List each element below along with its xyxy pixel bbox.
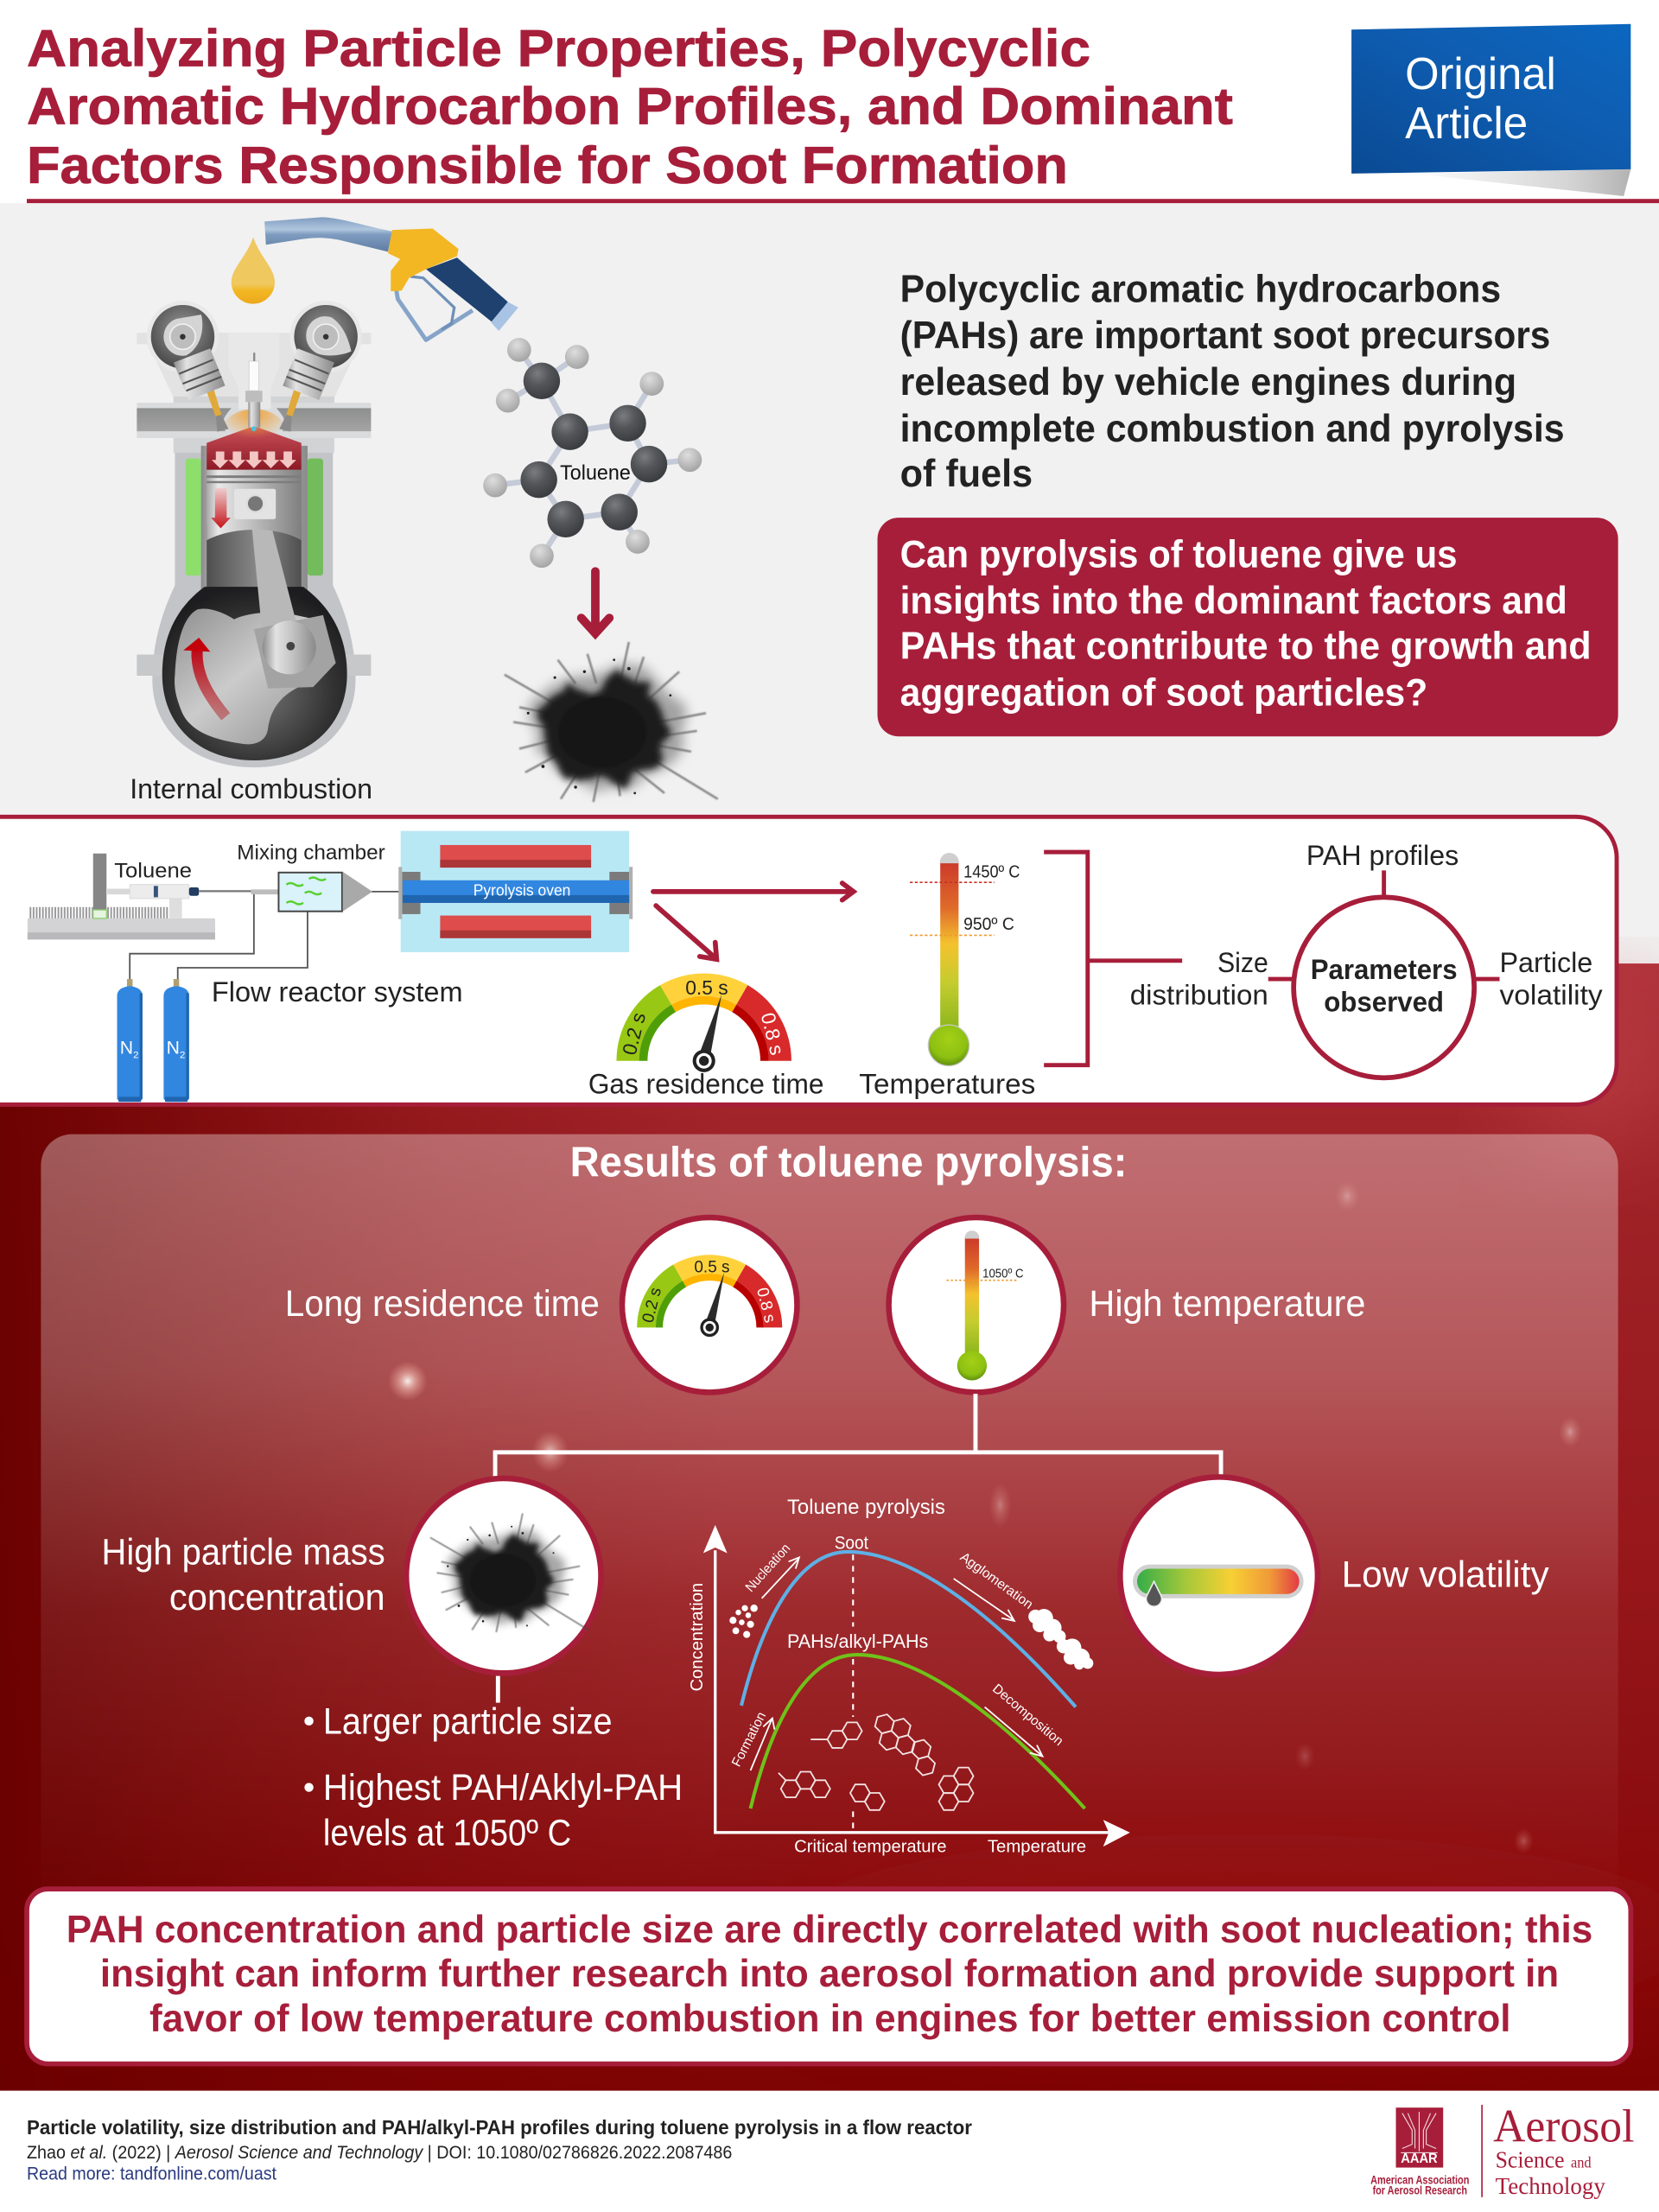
molecule: toluene (483, 338, 702, 568)
citation: Zhao et al. (2022) | Aerosol Science and Technology | DOI: 10.1080/02786826.2022.2087486 (27, 2143, 732, 2163)
PAH label: PAHs/alkyl-PAHs (787, 1630, 928, 1652)
counterweight (175, 608, 336, 744)
molecule label: Toluene (560, 461, 631, 485)
coolant left (186, 459, 201, 575)
bore (207, 524, 302, 593)
panel: methods (0, 817, 1617, 1104)
gauge: gas residence time (616, 974, 791, 1072)
pyrolysis oven: Pyrolysis oven (474, 881, 570, 899)
conclusion box: PAH concentration and particle size are directly correlated with soot nucleation; this (67, 1909, 1592, 1951)
connector (251, 889, 281, 894)
pin hole (286, 642, 295, 651)
intro text: Polycyclic aromatic hydrocarbons (900, 268, 1501, 310)
label: toluene: Toluene (114, 860, 192, 883)
footer (0, 2091, 1659, 2212)
red textured background (0, 963, 1659, 2092)
piston (207, 470, 302, 540)
label: long residence time: Long residence time (285, 1283, 600, 1324)
connector: parameter spokes (1268, 870, 1500, 979)
circle: low volatility (1120, 1477, 1318, 1675)
crank pin (263, 620, 316, 674)
cylinder liner (201, 446, 308, 593)
label: particle volatility: volatility (1500, 978, 1603, 1010)
illustration: internal combustion engine (130, 301, 372, 804)
PAH curve (751, 1655, 1085, 1808)
molecular bonds (495, 350, 690, 556)
soot label: Soot (835, 1534, 868, 1554)
gauge: gas residence time: 0.5 s (685, 976, 728, 999)
connector: soot to bullets (497, 1676, 499, 1703)
label: size distribution: distribution (1130, 978, 1268, 1010)
circle: residence gauge: 0.2 s (639, 1286, 665, 1325)
title: Factors Responsible for Soot Formation (27, 136, 1068, 194)
tubing (130, 892, 401, 981)
circle: parameters observed (1294, 897, 1474, 1077)
right cam (290, 301, 362, 372)
piston rings (207, 475, 302, 483)
bracket connector (1044, 852, 1182, 1065)
agglomerate cloud 2 (1057, 1638, 1093, 1669)
arrow: toluene to soot (582, 571, 609, 633)
pump post (93, 854, 106, 910)
badge: Original Article: Original (1405, 49, 1556, 99)
question box (878, 518, 1618, 736)
icon: fuel drop (232, 237, 275, 304)
results panel (41, 1135, 1618, 1924)
circle: residence gauge: 0.8 s (753, 1286, 779, 1325)
pump slider (93, 910, 106, 918)
diagram: flow reactor system (28, 831, 632, 1102)
logo: Aerosol Science and Technology: Technology (1496, 2173, 1605, 2200)
lower head (174, 397, 334, 453)
thermometer: temperatures (910, 853, 1020, 1065)
ignition glow (223, 409, 285, 451)
thermometer: temperatures: 950º C (963, 915, 1014, 934)
nitrogen cylinder 2: N (167, 1039, 180, 1058)
pump screw (29, 909, 168, 916)
label: high particle mass concentration: concentration (169, 1577, 385, 1618)
pressure arrows (212, 451, 296, 468)
intro text: (PAHs) are important soot precursors (900, 315, 1550, 357)
rotation arrowhead (183, 638, 210, 652)
label: size distribution: Size (1217, 946, 1268, 978)
logo: AAAR: American Association (1370, 2172, 1469, 2186)
logo: AAAR: AAAR (1401, 2152, 1438, 2166)
combustion chamber (207, 426, 302, 470)
left valve (174, 348, 228, 432)
circle: parameters observed: observed (1324, 986, 1444, 1018)
chart: toluene pyrolysis (688, 1497, 1130, 1857)
nitrogen cylinder 1: 2 (133, 1050, 138, 1060)
nitrogen cylinder 2 (163, 979, 189, 1102)
bullet list: levels at 1050º C (323, 1813, 571, 1853)
question box: PAHs that contribute to the growth and (900, 625, 1592, 667)
connector: results tree (495, 1394, 1221, 1478)
label: flow reactor system: Flow reactor system (212, 976, 463, 1007)
crank flanges (137, 655, 371, 676)
arrow: oven to residence time (656, 906, 716, 959)
mixing chamber (278, 872, 372, 912)
title: Aromatic Hydrocarbon Profiles, and Dominant (27, 77, 1233, 136)
agglomerate cloud 1 (1028, 1609, 1065, 1643)
gauge: gas residence time: 0.8 s (757, 1010, 789, 1058)
piston pin (247, 495, 264, 512)
spark plug (245, 353, 263, 431)
conclusion box: insight can inform further research into aerosol formation and provide support in (100, 1953, 1559, 1995)
citation: Particle volatility, size distribution and PAH/alkyl-PAH profiles during toluene pyrolysis in a flow reactor (27, 2116, 972, 2139)
question box: Can pyrolysis of toluene give us (900, 533, 1458, 575)
logo: Aerosol Science and Technology (1493, 2100, 1634, 2200)
chart axes (703, 1525, 1130, 1847)
nitrogen cylinder 2: 2 (180, 1050, 185, 1060)
circle: parameters observed: Parameters (1311, 953, 1458, 985)
molecule: methylnaphthalene (810, 1722, 862, 1748)
title rule (27, 199, 1659, 203)
logo: AAAR (1370, 2107, 1469, 2197)
bullet list: Larger particle size (323, 1701, 613, 1742)
citation: Read more: tandfonline.com/uast (27, 2164, 276, 2183)
formation arrow: Formation (729, 1710, 769, 1770)
arrow: oven to temperature (653, 883, 854, 900)
head side strips (137, 403, 371, 438)
circle: residence gauge (622, 1217, 797, 1392)
conclusion box (27, 1889, 1630, 2064)
agglomeration arrow: Agglomeration (957, 1550, 1035, 1612)
molecule: benzopyrene (873, 1713, 938, 1777)
coolant right (308, 459, 323, 575)
critical temperature marker (852, 1554, 854, 1830)
intro text: incomplete combustion and pyrolysis (900, 408, 1565, 450)
label: low volatility: Low volatility (1342, 1554, 1549, 1595)
circle: soot (406, 1478, 601, 1673)
x axis label: critical temperature: Critical temperature (794, 1838, 947, 1857)
title: Analyzing Particle Properties, Polycyclic (27, 19, 1090, 78)
logo: Aerosol Science and Technology: Science (1496, 2147, 1565, 2174)
heading: results: Results of toluene pyrolysis: (570, 1140, 1127, 1186)
caption: internal combustion: Internal combustion (130, 772, 372, 804)
molecule: pyrene (939, 1768, 974, 1810)
centre tower (228, 333, 279, 409)
intro text: released by vehicle engines during (900, 361, 1516, 404)
logo: Aerosol Science and Technology: Aerosol (1493, 2100, 1634, 2152)
label: particle volatility: Particle (1500, 946, 1592, 978)
badge: Original Article (1351, 24, 1630, 196)
x axis label: temperature: Temperature (988, 1838, 1086, 1857)
illustration: soot particle (505, 642, 718, 802)
rotation arrow (197, 646, 226, 716)
intro text: of fuels (900, 453, 1033, 495)
bullet list (304, 1701, 683, 1853)
logo: Aerosol Science and Technology: and (1571, 2154, 1592, 2171)
icon: fuel nozzle (264, 217, 518, 340)
circle: high temperature thermometer: 1050º C (982, 1267, 1024, 1281)
nucleation arrow: Nucleation (743, 1541, 793, 1595)
logo divider (1481, 2105, 1483, 2197)
label: temperatures: Temperatures (859, 1067, 1035, 1099)
label: particle volatility (1500, 946, 1603, 1010)
nuclei dots (729, 1605, 758, 1638)
nitrogen cylinder 1 (118, 979, 143, 1102)
title (27, 19, 1233, 194)
nitrogen cylinder 1: N (120, 1039, 133, 1058)
badge: Original Article: Article (1405, 99, 1528, 149)
connecting rod (252, 530, 297, 635)
engine casing (152, 430, 355, 767)
background sparkles (388, 1004, 1618, 1853)
question box: aggregation of soot particles? (900, 671, 1427, 714)
upper head (152, 333, 355, 397)
citation (27, 2116, 972, 2183)
bullet list: Highest PAH/Aklyl-PAH (323, 1767, 683, 1808)
label: high temperature: High temperature (1089, 1283, 1365, 1324)
piston arrow (211, 488, 231, 528)
hydrogen atoms (483, 338, 702, 568)
label: high particle mass concentration (102, 1532, 385, 1618)
molecule: methylphenanthrene (779, 1772, 830, 1797)
thermometer: temperatures: 1450º C (963, 863, 1020, 882)
y axis label: Concentration (688, 1583, 707, 1692)
pyrolysis oven (398, 831, 632, 952)
label: high particle mass concentration: High particle mass (102, 1532, 385, 1573)
label: mixing chamber: Mixing chamber (237, 841, 385, 864)
pump base (28, 918, 215, 939)
intro section background (0, 203, 1659, 965)
circle: residence gauge: 0.5 s (694, 1259, 729, 1277)
question box: insights into the dominant factors and (900, 580, 1567, 622)
piston pin window (234, 489, 276, 519)
label: PAH profiles: PAH profiles (1306, 839, 1459, 871)
syringe (107, 885, 251, 899)
label: size distribution (1130, 946, 1268, 1010)
soot curve (741, 1552, 1076, 1707)
left cam (147, 301, 219, 372)
crank journal block (254, 615, 336, 689)
label: gas residence time: Gas residence time (588, 1067, 823, 1099)
right valve (279, 348, 334, 432)
conclusion box: favor of low temperature combustion in engines for better emission control (149, 1998, 1511, 2040)
decomposition arrow: Decomposition (989, 1681, 1066, 1749)
pump support (169, 899, 182, 918)
carbon atoms (520, 363, 667, 537)
logo: AAAR: for Aerosol Research (1373, 2183, 1467, 2197)
molecule: naphthalene (850, 1784, 885, 1810)
gauge: gas residence time: 0.2 s (618, 1010, 650, 1058)
circle: high temperature thermometer (889, 1217, 1064, 1392)
intro text (900, 268, 1565, 495)
cam flanges (137, 333, 371, 344)
crankcase interior (162, 587, 347, 760)
head block (137, 408, 371, 431)
chart title: Toluene pyrolysis (787, 1497, 945, 1519)
